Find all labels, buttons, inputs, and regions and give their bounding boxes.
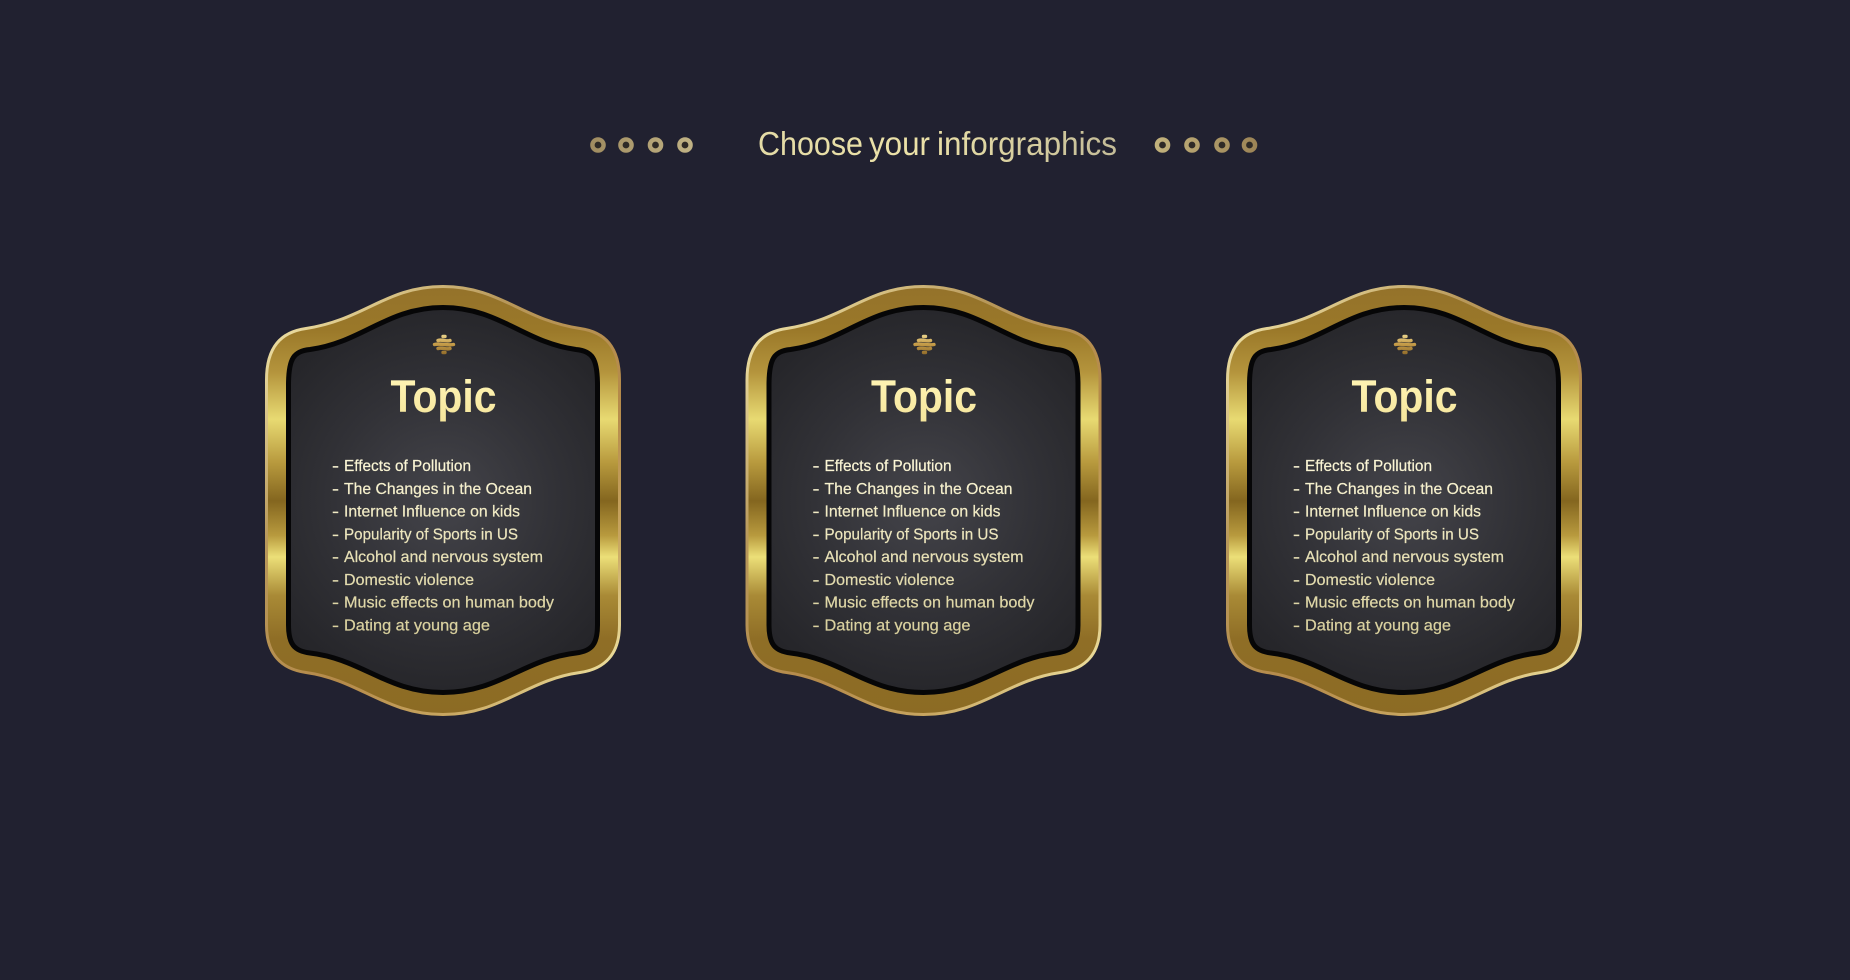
topic list: - — [812, 504, 820, 520]
dark plate — [288, 308, 598, 692]
panel: topic card 2 — [747, 286, 1100, 714]
topic list: Popularity of Sports in US — [344, 526, 518, 544]
topic list: Internet Influence on kids — [344, 504, 520, 520]
topic list — [812, 458, 1034, 634]
gold frame — [747, 286, 1100, 714]
topic list: - — [1293, 481, 1300, 498]
gold frame — [266, 286, 620, 714]
topic list: - — [332, 526, 339, 544]
topic list: - — [812, 549, 820, 566]
topic list: - — [812, 458, 820, 475]
topic list: Effects of Pollution — [824, 458, 952, 475]
dark plate — [1250, 308, 1558, 692]
topic list: Internet Influence on kids — [1305, 504, 1481, 520]
topic list: Dating at young age — [824, 618, 971, 634]
topic list: - — [332, 504, 339, 520]
heading: Topic — [1352, 371, 1458, 422]
topic list: Music effects on human body — [1305, 594, 1515, 612]
topic list: - — [1293, 458, 1300, 475]
topic list: - — [1293, 526, 1300, 544]
title: inforgraphics — [937, 125, 1117, 162]
title: Choose — [758, 125, 863, 162]
topic list: Effects of Pollution — [1305, 458, 1432, 475]
panel: topic card 1 — [266, 286, 620, 714]
icon: gold emblem — [915, 336, 934, 352]
title: your — [869, 125, 930, 162]
topic list: - — [332, 618, 339, 634]
topic list: Dating at young age — [344, 618, 490, 634]
topic list: - — [1293, 618, 1300, 634]
topic list — [1293, 458, 1515, 634]
topic list: - — [1293, 594, 1300, 612]
topic list: Internet Influence on kids — [824, 504, 1000, 520]
topic list: Domestic violence — [344, 572, 474, 589]
topic list: The Changes in the Ocean — [1305, 481, 1493, 498]
topic list: Effects of Pollution — [344, 458, 471, 475]
title — [758, 125, 1117, 162]
heading: Topic — [871, 371, 977, 422]
topic list: Popularity of Sports in US — [1305, 526, 1479, 544]
topic list: Music effects on human body — [344, 594, 554, 612]
topic list: Domestic violence — [824, 572, 955, 589]
topic list: - — [812, 572, 820, 589]
topic list: - — [332, 549, 339, 566]
topic list: The Changes in the Ocean — [344, 481, 532, 498]
topic list: - — [812, 618, 820, 634]
topic list: - — [812, 526, 820, 544]
topic list: - — [812, 594, 820, 612]
panel: topic card 3 — [1228, 286, 1580, 714]
header row — [592, 125, 1255, 162]
gold frame — [1228, 286, 1580, 714]
topic list: Alcohol and nervous system — [344, 549, 543, 566]
topic list: - — [332, 458, 339, 475]
topic list: - — [332, 572, 339, 589]
topic list: - — [1293, 504, 1300, 520]
topic list: Popularity of Sports in US — [824, 526, 998, 544]
topic list: Dating at young age — [1305, 618, 1451, 634]
icon: gold emblem — [1396, 336, 1414, 352]
topic list — [332, 458, 554, 634]
topic list: Domestic violence — [1305, 572, 1435, 589]
dark plate — [769, 308, 1078, 692]
topic list: - — [812, 481, 820, 498]
left dots — [592, 139, 691, 151]
topic list: - — [1293, 572, 1300, 589]
topic list: Alcohol and nervous system — [824, 549, 1024, 566]
topic list: - — [1293, 549, 1300, 566]
topic list: - — [332, 481, 339, 498]
icon: gold emblem — [434, 336, 454, 352]
topic list: Music effects on human body — [824, 594, 1034, 612]
right dots — [1157, 139, 1255, 151]
heading: Topic — [390, 371, 496, 422]
topic list: The Changes in the Ocean — [824, 481, 1012, 498]
topic list: Alcohol and nervous system — [1305, 549, 1504, 566]
topic list: - — [332, 594, 339, 612]
